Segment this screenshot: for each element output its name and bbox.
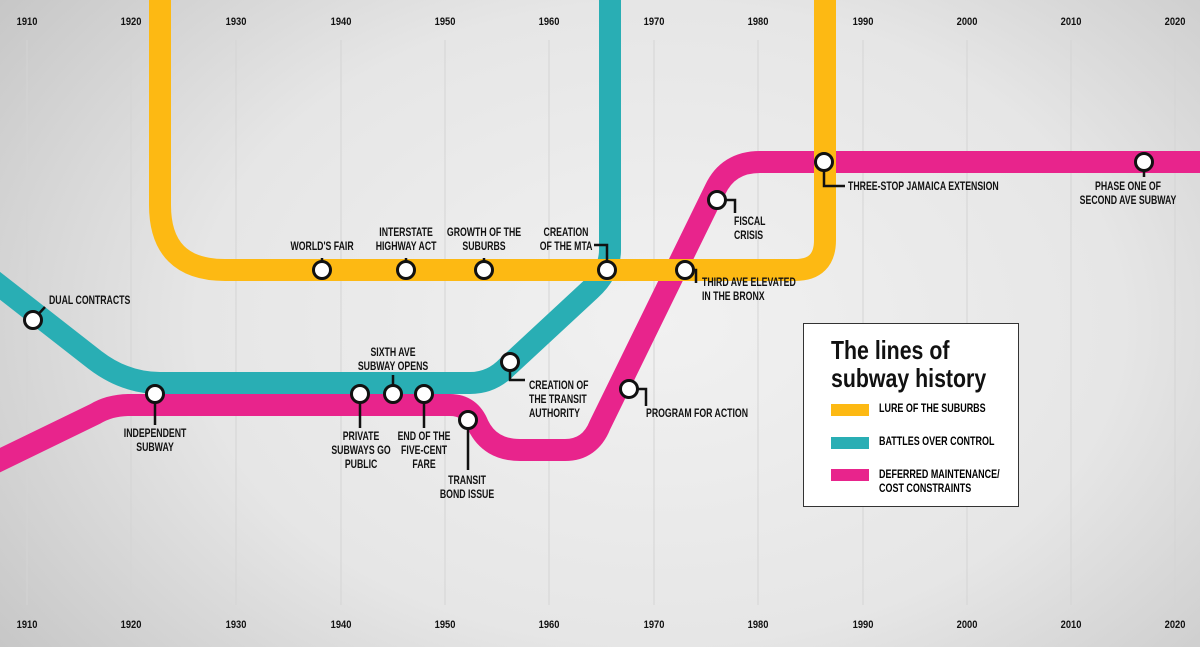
axis: bottom years: [17, 619, 1186, 631]
axis: bottom years: 1930: [226, 619, 247, 631]
legend title: subway history: [831, 363, 986, 393]
station labels: FARE: [412, 459, 436, 471]
axis: top years: 1910: [17, 16, 38, 28]
axis: bottom years: 1990: [853, 619, 874, 631]
line: lure of the suburbs (yellow): [160, 0, 825, 270]
legend item: pink: [831, 469, 1000, 495]
station labels: SUBWAY OPENS: [358, 361, 428, 373]
axis: bottom years: 1940: [331, 619, 352, 631]
station labels: SECOND AVE SUBWAY: [1080, 195, 1177, 207]
axis: bottom years: 1970: [644, 619, 665, 631]
station labels: END OF THE: [398, 431, 451, 443]
station labels: SUBWAY: [136, 442, 174, 454]
stations: [24, 154, 1152, 428]
station labels: IN THE BRONX: [702, 291, 765, 303]
station labels: SUBURBS: [462, 241, 506, 253]
axis: bottom years: 1980: [748, 619, 769, 631]
axis: bottom years: 1950: [435, 619, 456, 631]
station labels: SUBWAYS GO: [331, 445, 391, 457]
axis: top years: 1920: [121, 16, 142, 28]
axis: top years: 2020: [1165, 16, 1186, 28]
axis: top years: 1970: [644, 16, 665, 28]
station labels: THE TRANSIT: [529, 394, 587, 406]
station labels: PRIVATE: [343, 431, 379, 443]
station labels: FISCAL: [734, 216, 766, 228]
station labels: PHASE ONE OF: [1095, 181, 1161, 193]
station labels: OF THE MTA: [540, 241, 593, 253]
leader lines: [33, 162, 1144, 470]
axis: top years: 1940: [331, 16, 352, 28]
legend title: [831, 335, 986, 393]
station labels: CRISIS: [734, 230, 763, 242]
station labels: [49, 181, 1177, 501]
station labels: PUBLIC: [345, 459, 378, 471]
legend item: teal: BATTLES OVER CONTROL: [879, 436, 994, 448]
axis: top years: 1930: [226, 16, 247, 28]
line: deferred maintenance (pink): [0, 162, 1200, 465]
line: battles over control (teal): [0, 0, 610, 383]
legend item: pink: DEFERRED MAINTENANCE/: [879, 469, 1000, 481]
station labels: BOND ISSUE: [440, 489, 494, 501]
station labels: DUAL CONTRACTS: [49, 295, 130, 307]
legend item: yellow: LURE OF THE SUBURBS: [879, 403, 986, 415]
station labels: THREE-STOP JAMAICA EXTENSION: [848, 181, 999, 193]
station labels: FIVE-CENT: [401, 445, 448, 457]
station labels: PROGRAM FOR ACTION: [646, 408, 748, 420]
legend: [803, 323, 1019, 507]
station labels: CREATION: [544, 227, 588, 239]
axis: bottom years: 2020: [1165, 619, 1186, 631]
station labels: AUTHORITY: [529, 408, 580, 420]
station labels: GROWTH OF THE: [447, 227, 521, 239]
station labels: INDEPENDENT: [124, 428, 187, 440]
legend item: pink: COST CONSTRAINTS: [879, 483, 971, 495]
axis: top years: 2010: [1061, 16, 1082, 28]
axis: bottom years: 2010: [1061, 619, 1082, 631]
legend item: yellow: [831, 403, 986, 416]
station labels: SIXTH AVE: [370, 347, 416, 359]
axis: bottom years: 1910: [17, 619, 38, 631]
axis: top years: [17, 16, 1186, 28]
axis: top years: 1990: [853, 16, 874, 28]
axis: top years: 1980: [748, 16, 769, 28]
station labels: THIRD AVE ELEVATED: [702, 277, 796, 289]
station labels: CREATION OF: [529, 380, 588, 392]
axis: bottom years: 1920: [121, 619, 142, 631]
axis: top years: 1950: [435, 16, 456, 28]
station labels: HIGHWAY ACT: [376, 241, 437, 253]
axis: top years: 2000: [957, 16, 978, 28]
station labels: INTERSTATE: [379, 227, 433, 239]
axis: bottom years: 2000: [957, 619, 978, 631]
station labels: WORLD'S FAIR: [290, 241, 354, 253]
axis: bottom years: 1960: [539, 619, 560, 631]
legend title: The lines of: [831, 335, 949, 365]
station labels: TRANSIT: [448, 475, 487, 487]
legend item: teal: [831, 436, 994, 449]
axis: top years: 1960: [539, 16, 560, 28]
